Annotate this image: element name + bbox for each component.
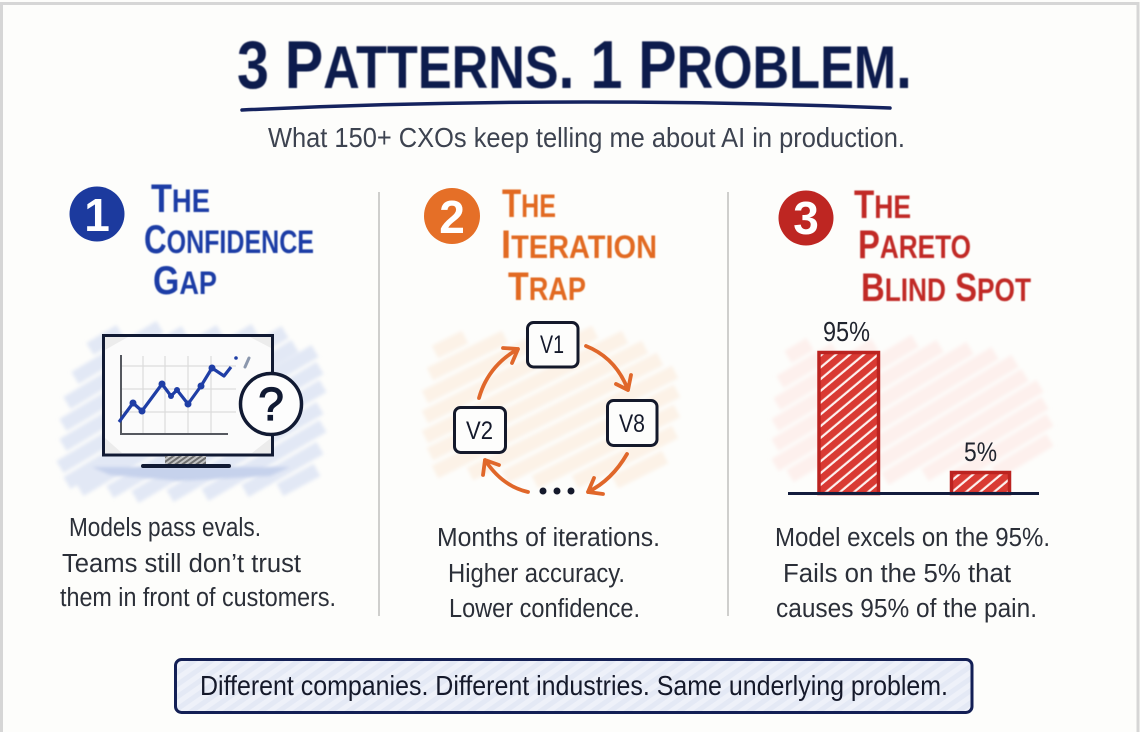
version box V2 (454, 408, 506, 452)
body text: confidence gap: Teams still don’t trust (62, 550, 301, 578)
orange scribble background (425, 332, 677, 482)
callout: bottom summary (176, 660, 972, 712)
panel: the confidence gap (60, 177, 336, 612)
heading: the iteration trap (501, 182, 657, 309)
body text: iteration trap (437, 524, 660, 623)
body text: confidence gap (60, 514, 336, 612)
loop arrows (479, 346, 631, 494)
screen corner shading (105, 337, 271, 453)
monitor screen (104, 336, 272, 455)
heading: the iteration trap: TRAP (508, 265, 586, 309)
heading: the confidence gap (144, 177, 314, 303)
chart axes (121, 355, 228, 434)
heading: the pareto blind spot: THE (854, 183, 911, 227)
chart baseline (788, 492, 1039, 495)
monitor stand shadow (92, 467, 290, 481)
body text: pareto blind spot (775, 524, 1050, 623)
monitor base (143, 464, 229, 468)
callout: bottom summary: Different companies. Different industries. Same underlying problem. (200, 670, 948, 701)
number badge 3 (778, 190, 834, 246)
subtitle: What 150+ CXOs keep telling me about AI in production. (268, 122, 905, 153)
number badge 2 (424, 188, 480, 244)
version box V8: V8 (619, 410, 645, 438)
number badge 1 (70, 186, 124, 242)
title: 3 PATTERNS. 1 PROBLEM. (237, 27, 912, 103)
number badge 3: 3 (793, 192, 819, 244)
arrow V2 to V1 (479, 348, 518, 398)
ellipsis dots (540, 488, 574, 494)
bar chart: 95 percent and 5 percent (775, 316, 1050, 494)
monitor stand (165, 456, 206, 465)
column divider 1 (378, 192, 380, 616)
illustration: iteration loop (425, 322, 677, 494)
heading: the iteration trap: THE (502, 182, 556, 226)
chart points (130, 356, 238, 414)
body text: pareto blind spot: Model excels on the 95%. (775, 524, 1050, 552)
arrow V1 to V8 (586, 346, 631, 390)
number badge 2: 2 (439, 191, 465, 243)
label 5 percent: 5% (964, 437, 997, 467)
red scribble background (775, 341, 1050, 479)
panel: the pareto blind spot (775, 183, 1050, 623)
bar 5 percent (952, 472, 1010, 494)
body text: iteration trap: Months of iterations. (437, 524, 660, 552)
body text: iteration trap: Lower confidence. (449, 595, 640, 623)
heading: the confidence gap: CONFIDENCE (144, 218, 314, 262)
number badge 1: 1 (84, 189, 110, 241)
version box V1 (528, 322, 578, 367)
body text: pareto blind spot: causes 95% of the pain. (776, 595, 1037, 623)
blue scribble background (60, 327, 323, 497)
bar 95 percent (819, 352, 878, 494)
faded chart marks (245, 358, 249, 367)
body text: confidence gap: Models pass evals. (69, 514, 261, 542)
question mark: ? (258, 378, 284, 430)
arrow V8 to dots (588, 454, 627, 494)
body text: confidence gap: them in front of customers. (60, 584, 336, 612)
body text: iteration trap: Higher accuracy. (448, 560, 625, 588)
body text: pareto blind spot: Fails on the 5% that (783, 560, 1011, 588)
version box V2: V2 (466, 417, 493, 445)
question mark circle (240, 374, 302, 434)
heading: the confidence gap: THE (151, 177, 210, 221)
chart grid (120, 356, 236, 434)
heading: the confidence gap: GAP (153, 259, 217, 303)
panel: the iteration trap (424, 182, 677, 623)
heading: the pareto blind spot: PARETO (858, 223, 971, 267)
column divider 2 (727, 192, 729, 616)
chart line (119, 367, 231, 422)
version box V8 (608, 400, 657, 446)
version box V1: V1 (540, 331, 564, 359)
heading: the pareto blind spot (854, 183, 1031, 310)
label 95 percent: 95% (823, 316, 870, 347)
heading: the iteration trap: ITERATION (501, 223, 657, 267)
arrow dots to V2 (483, 460, 528, 492)
heading: the pareto blind spot: BLIND SPOT (861, 266, 1031, 310)
illustration: monitor with chart and question mark (60, 327, 323, 497)
title underline (242, 102, 890, 110)
